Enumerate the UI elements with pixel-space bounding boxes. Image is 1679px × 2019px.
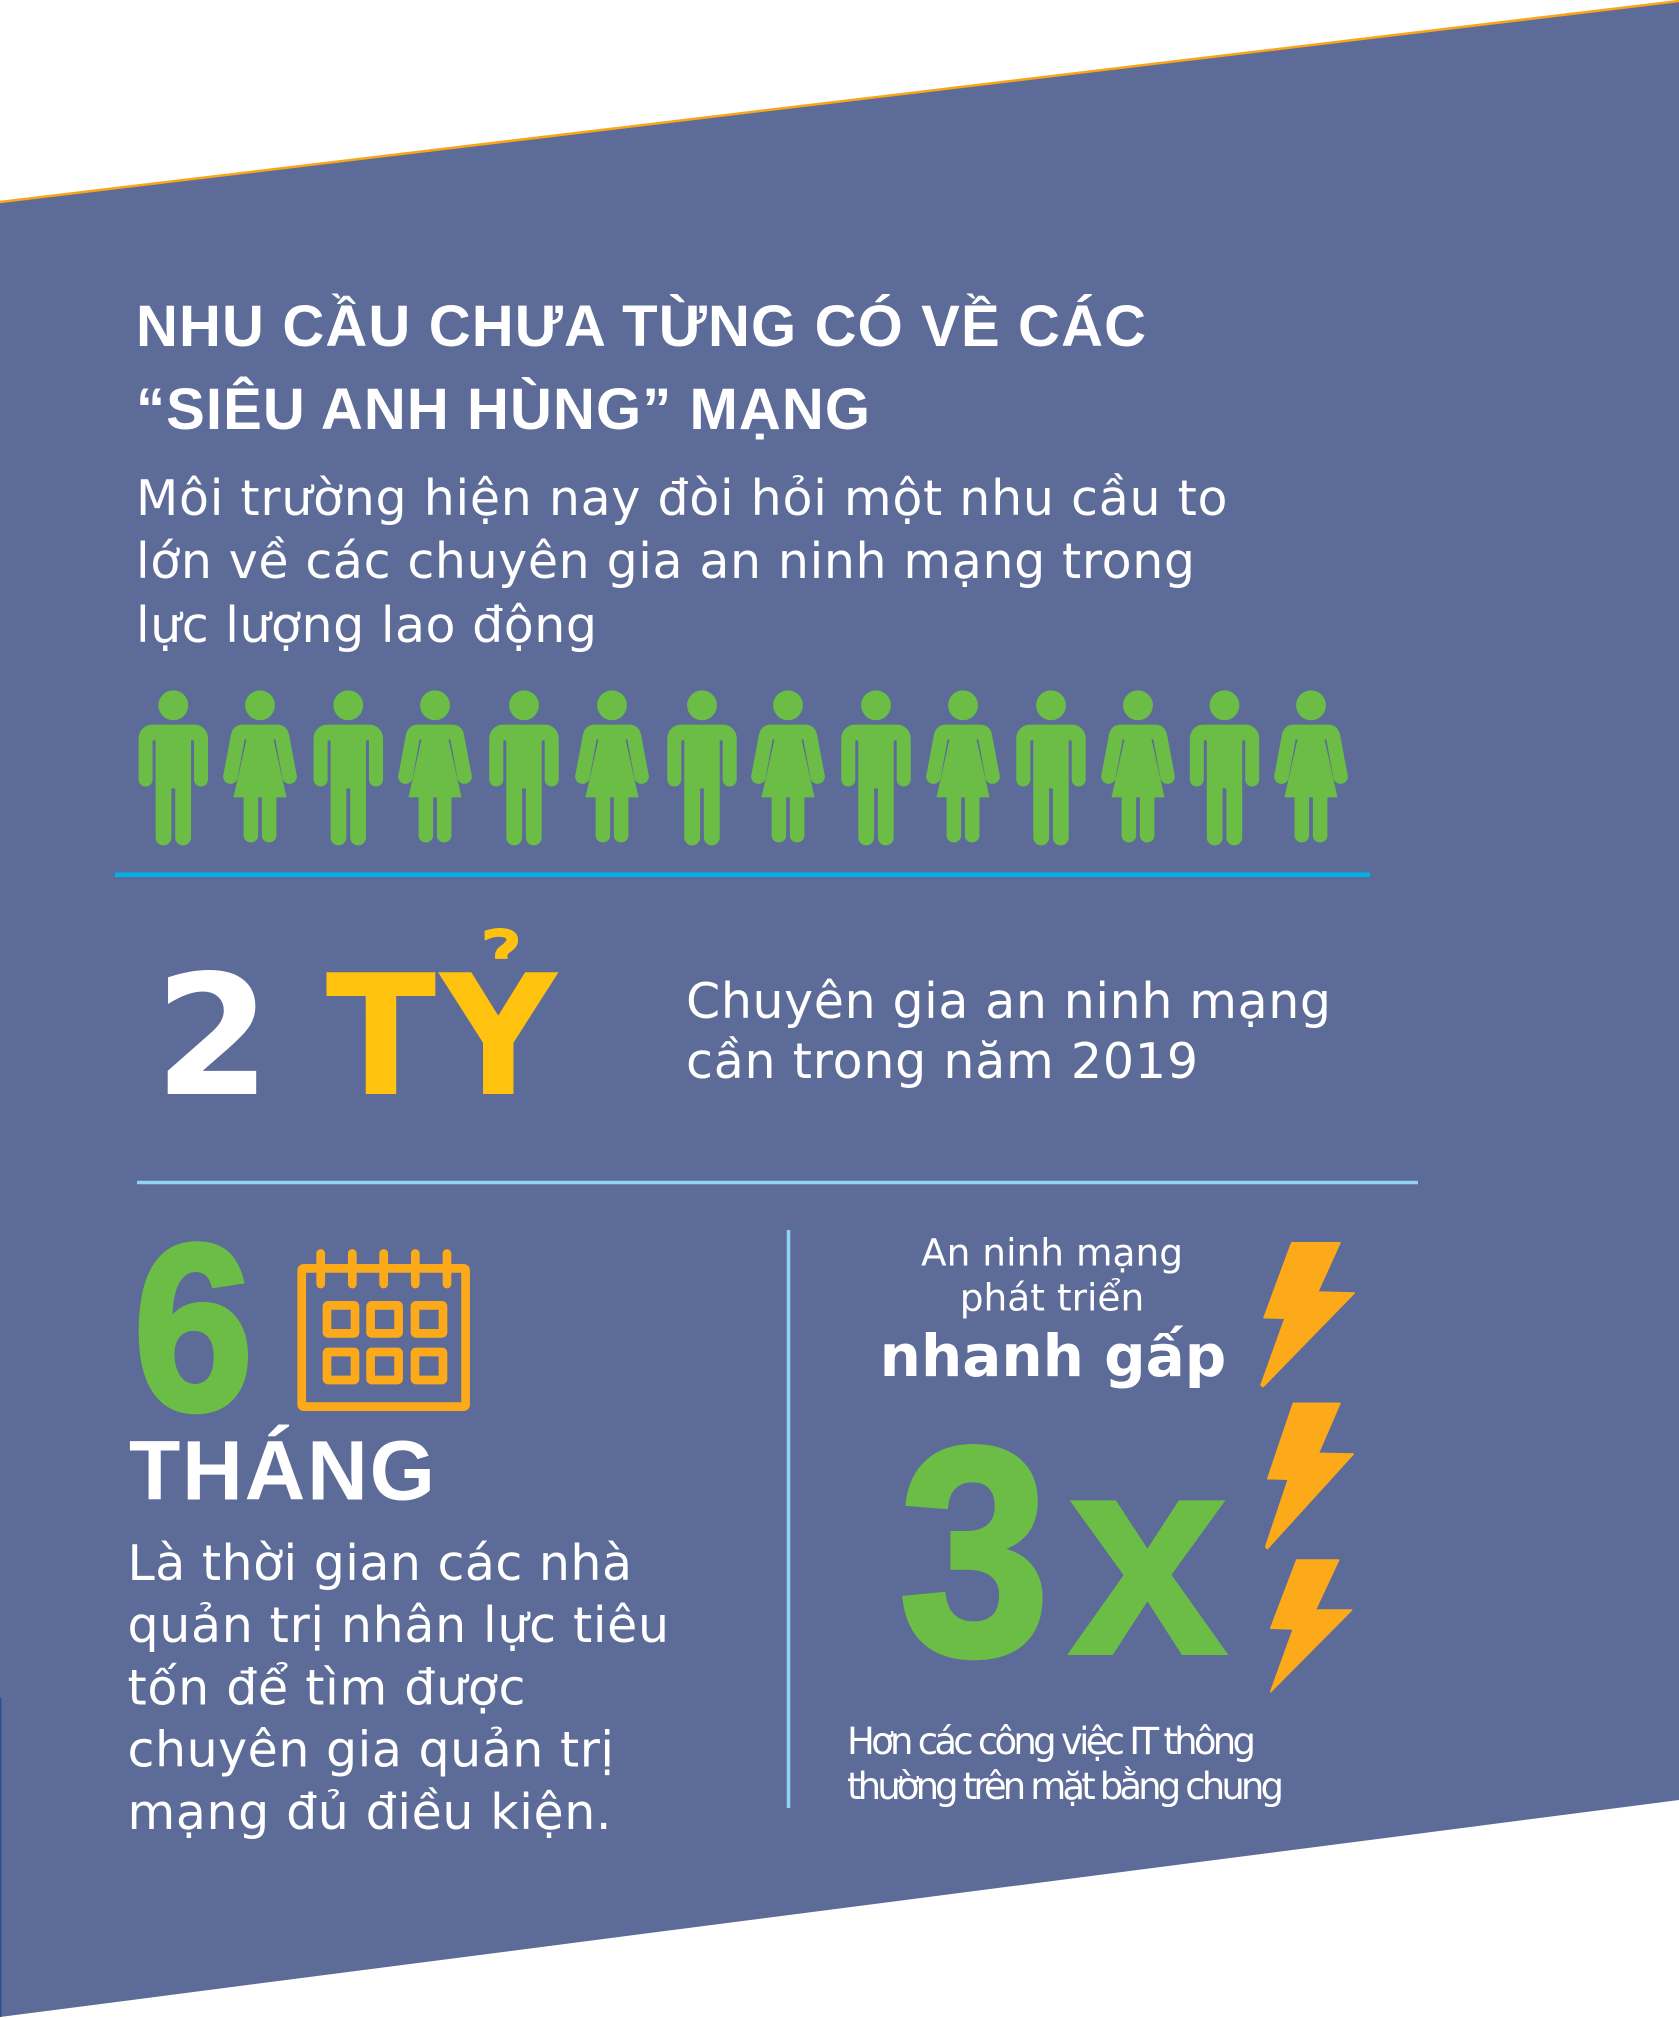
text block: hiring time: mạng đủ điều kiện.: [128, 1784, 612, 1841]
stat description: [686, 973, 1331, 1090]
text: comparison note: thường trên mặt bằng chung: [847, 1765, 1284, 1808]
icon: lightning bolts: [1261, 1243, 1354, 1692]
text block: hiring time: Là thời gian các nhà: [128, 1535, 632, 1592]
text: comparison note: Hơn các công việc IT thông: [847, 1720, 1256, 1763]
stat: 3x: 3: [899, 1387, 1050, 1718]
text: growth intro: An ninh mạng: [921, 1230, 1183, 1274]
stat: 2 tỷ: Ỷ: [438, 921, 559, 1134]
text: comparison note: [847, 1720, 1284, 1808]
heading: [136, 294, 1146, 442]
heading: “SIÊU ANH HÙNG” MẠNG: [136, 377, 870, 442]
stat description: cần trong năm 2019: [686, 1033, 1198, 1090]
intro text block: lớn về các chuyên gia an ninh mạng trong: [136, 533, 1195, 590]
stat: 3x: [899, 1387, 1229, 1718]
text block: hiring time: [128, 1535, 669, 1841]
stat: 2 tỷ: Ỷ: [454, 929, 548, 1088]
text block: hiring time: quản trị nhân lực tiêu: [128, 1597, 669, 1654]
heading: NHU CẦU CHƯA TỪNG CÓ VỀ CÁC: [136, 294, 1146, 359]
stat description: Chuyên gia an ninh mạng: [686, 973, 1331, 1030]
text: growth intro: [880, 1230, 1226, 1390]
stat: 6: 6: [133, 1195, 254, 1461]
icon row: green people: [139, 691, 1347, 845]
stat: 2 tỷ: 2: [154, 940, 271, 1134]
intro text block: lực lượng lao động: [136, 597, 597, 654]
intro text block: Môi trường hiện nay đòi hỏi một nhu cầu to: [136, 470, 1228, 527]
orange top edge line: [0, 1, 1679, 202]
intro text block: [136, 470, 1228, 654]
text: growth intro: nhanh gấp: [880, 1322, 1226, 1390]
text block: hiring time: chuyên gia quản trị: [128, 1722, 614, 1778]
stat: 3x: x: [1068, 1394, 1229, 1714]
text block: hiring time: tốn để tìm được: [128, 1660, 526, 1716]
stat: 2 tỷ: [168, 928, 558, 1094]
stat: 2 tỷ: T: [326, 939, 436, 1134]
icon: calendar: [302, 1254, 466, 1407]
label: tháng: THÁNG: [129, 1424, 435, 1518]
text: growth intro: phát triển: [960, 1276, 1144, 1320]
